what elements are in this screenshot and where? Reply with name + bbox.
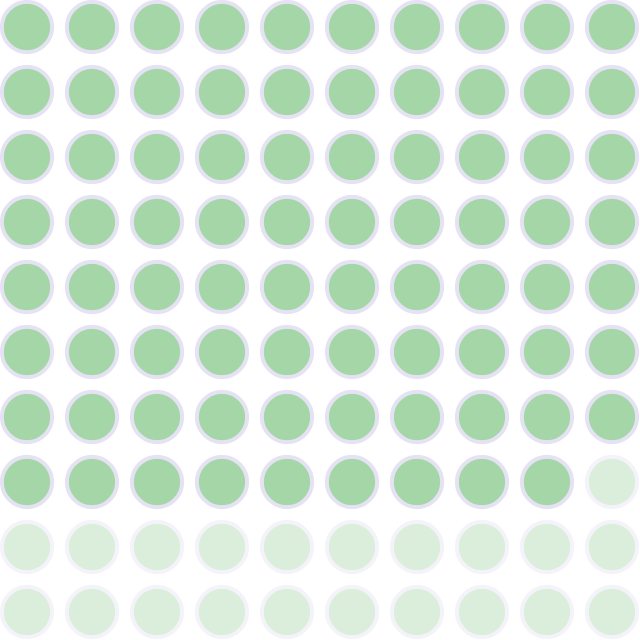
row 2: ten solid circles	[2, 67, 637, 117]
row 1: ten solid circles	[2, 2, 637, 52]
row 8: nine solid circles and one faded	[2, 457, 637, 507]
row 4: ten solid circles	[2, 197, 637, 247]
row 5: ten solid circles	[2, 262, 637, 312]
row 9: ten faded circles	[2, 522, 637, 572]
row 3: ten solid circles	[2, 132, 637, 182]
row 6: ten solid circles	[2, 327, 637, 377]
row 10: ten faded circles	[2, 587, 637, 637]
row 7: ten solid circles	[2, 392, 637, 442]
